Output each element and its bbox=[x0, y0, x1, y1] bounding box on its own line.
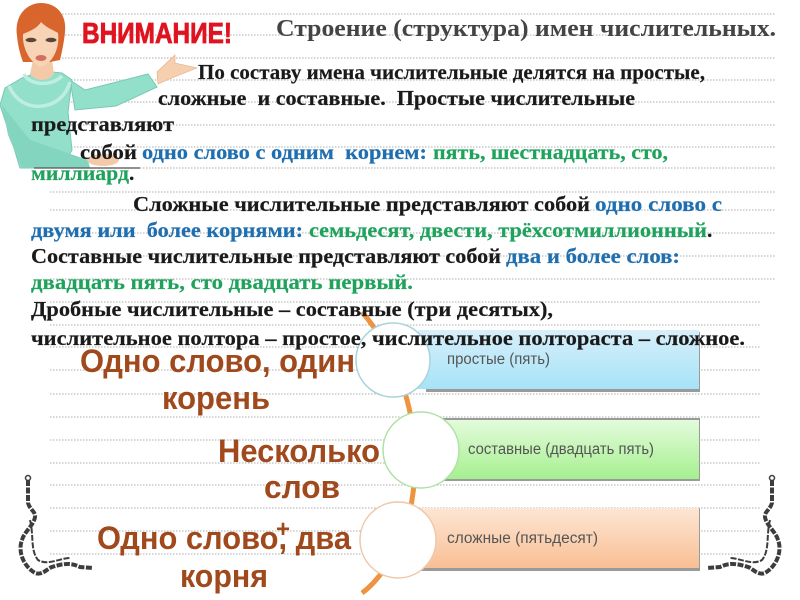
label: one word two roots bbox=[97, 520, 351, 594]
diagram box: compound bbox=[440, 418, 700, 481]
label: one word one root: корень bbox=[162, 380, 270, 416]
body text bbox=[31, 60, 722, 321]
body text: . bbox=[707, 218, 712, 242]
diagram box: complex bbox=[415, 508, 700, 571]
label: one word one root bbox=[80, 343, 355, 416]
label: several words bbox=[218, 433, 380, 505]
body text: . bbox=[129, 161, 134, 185]
ruffled collar bbox=[9, 82, 70, 106]
label: several words: слов bbox=[264, 469, 340, 505]
hand with pen on book bbox=[87, 154, 119, 166]
neck bbox=[30, 60, 54, 80]
orange connector curve bbox=[362, 312, 415, 593]
pointing hand bbox=[157, 55, 197, 84]
title: Строение (структура) имен числительных. bbox=[276, 16, 776, 42]
circle two bbox=[383, 412, 459, 488]
label: one word two roots: корня bbox=[180, 558, 268, 594]
body text: два и более слов: bbox=[506, 244, 680, 268]
box label: compound: составные (двадцать пять) bbox=[468, 441, 654, 458]
folded forearm bbox=[2, 105, 90, 168]
corner ornament right bbox=[707, 476, 779, 574]
body text: одно слово с bbox=[595, 192, 722, 216]
body text: Дробные числительные – составные (три десятых), bbox=[31, 297, 553, 321]
circle one bbox=[356, 323, 430, 397]
blouse torso bbox=[0, 71, 72, 168]
label: several words: Несколько bbox=[218, 433, 380, 469]
diagram box: simple bbox=[418, 330, 700, 392]
body text: собой bbox=[80, 140, 137, 164]
body text: двумя или более корнями: bbox=[31, 218, 303, 242]
body text: семьдесят, двести, трёхсотмиллионный bbox=[309, 218, 707, 242]
corner ornament left bbox=[21, 476, 93, 574]
label: one word two roots: Одно слово, два bbox=[97, 520, 351, 556]
woman presenter illustration bbox=[0, 3, 197, 168]
raised arm bbox=[70, 74, 157, 110]
hair bbox=[17, 3, 65, 62]
attention badge: ВНИМАНИЕ! bbox=[82, 18, 232, 50]
box label: complex: сложные (пятьдесят) bbox=[447, 530, 598, 547]
label: one word one root: Одно слово, один bbox=[80, 343, 355, 379]
body text: По составу имена числительные делятся на простые, bbox=[198, 60, 705, 84]
body text: одно слово с одним корнем: bbox=[142, 140, 427, 164]
body text: двадцать пять, сто двадцать первый. bbox=[31, 270, 413, 294]
plus sign: + bbox=[276, 516, 290, 543]
face bbox=[23, 22, 58, 67]
body text: пять, шестнадцать, сто, bbox=[433, 140, 668, 164]
box label: simple: простые (пять) bbox=[447, 351, 550, 368]
body text: сложные и составные. Простые числительные bbox=[158, 86, 635, 110]
body text: представляют bbox=[31, 112, 174, 136]
circle three bbox=[360, 502, 436, 578]
body text: Составные числительные представляют собой bbox=[31, 244, 501, 268]
body text last line: числительное полтора – простое, числительное полтораста – сложное. bbox=[31, 326, 745, 350]
body text: Сложные числительные представляют собой bbox=[133, 192, 590, 216]
body text: миллиард bbox=[31, 161, 129, 185]
